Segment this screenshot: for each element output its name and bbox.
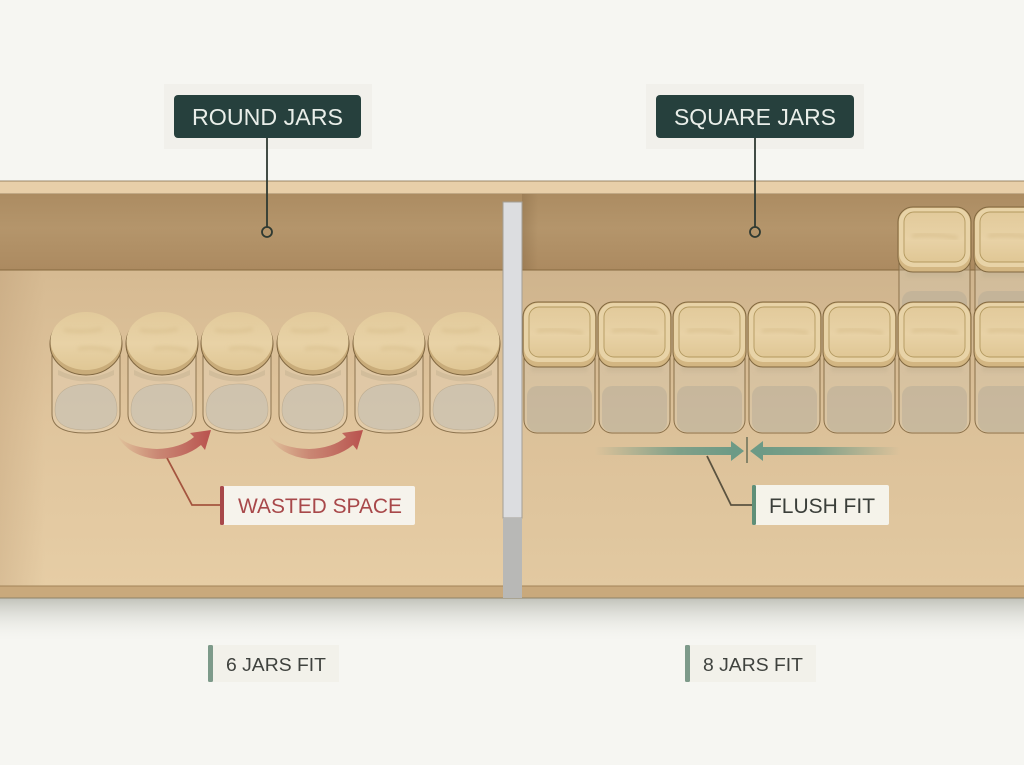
count: 8 jars fit: 8 JARS FIT <box>703 654 803 675</box>
drawer back wall <box>0 194 1024 270</box>
square jars front row <box>523 302 1024 433</box>
arrow: flush fit from left <box>595 441 744 461</box>
heading: round jars <box>164 84 372 149</box>
count: 6 jars fit <box>208 645 339 682</box>
arrow: flush fit from right <box>750 441 900 461</box>
drawer shadow <box>0 598 1024 644</box>
drawer floor left <box>0 270 503 586</box>
count: 6 jars fit: 6 JARS FIT <box>226 654 326 675</box>
pointer: round jars <box>262 138 272 237</box>
heading: square jars <box>646 84 864 149</box>
callout: wasted space <box>220 486 415 525</box>
flush contact tick <box>746 437 748 463</box>
leader: flush fit <box>707 456 753 505</box>
heading: square jars: SQUARE JARS <box>674 104 836 130</box>
callout: flush fit <box>752 485 889 525</box>
count: 8 jars fit <box>685 645 816 682</box>
square jars back row <box>898 207 1024 338</box>
drawer floor right <box>522 270 1024 586</box>
pointer: square jars <box>750 138 760 237</box>
callout: wasted space: WASTED SPACE <box>238 495 402 518</box>
drawer <box>0 181 1024 644</box>
arrow: wasted gap 2 <box>268 430 363 459</box>
drawer front rim <box>0 586 1024 598</box>
leader: wasted space <box>167 458 221 505</box>
centre divider <box>503 202 522 598</box>
drawer top rim <box>0 181 1024 194</box>
callout: flush fit: FLUSH FIT <box>769 495 875 518</box>
heading: round jars: ROUND JARS <box>192 104 343 130</box>
arrow: wasted gap 1 <box>117 430 211 459</box>
round jars row <box>50 312 500 433</box>
